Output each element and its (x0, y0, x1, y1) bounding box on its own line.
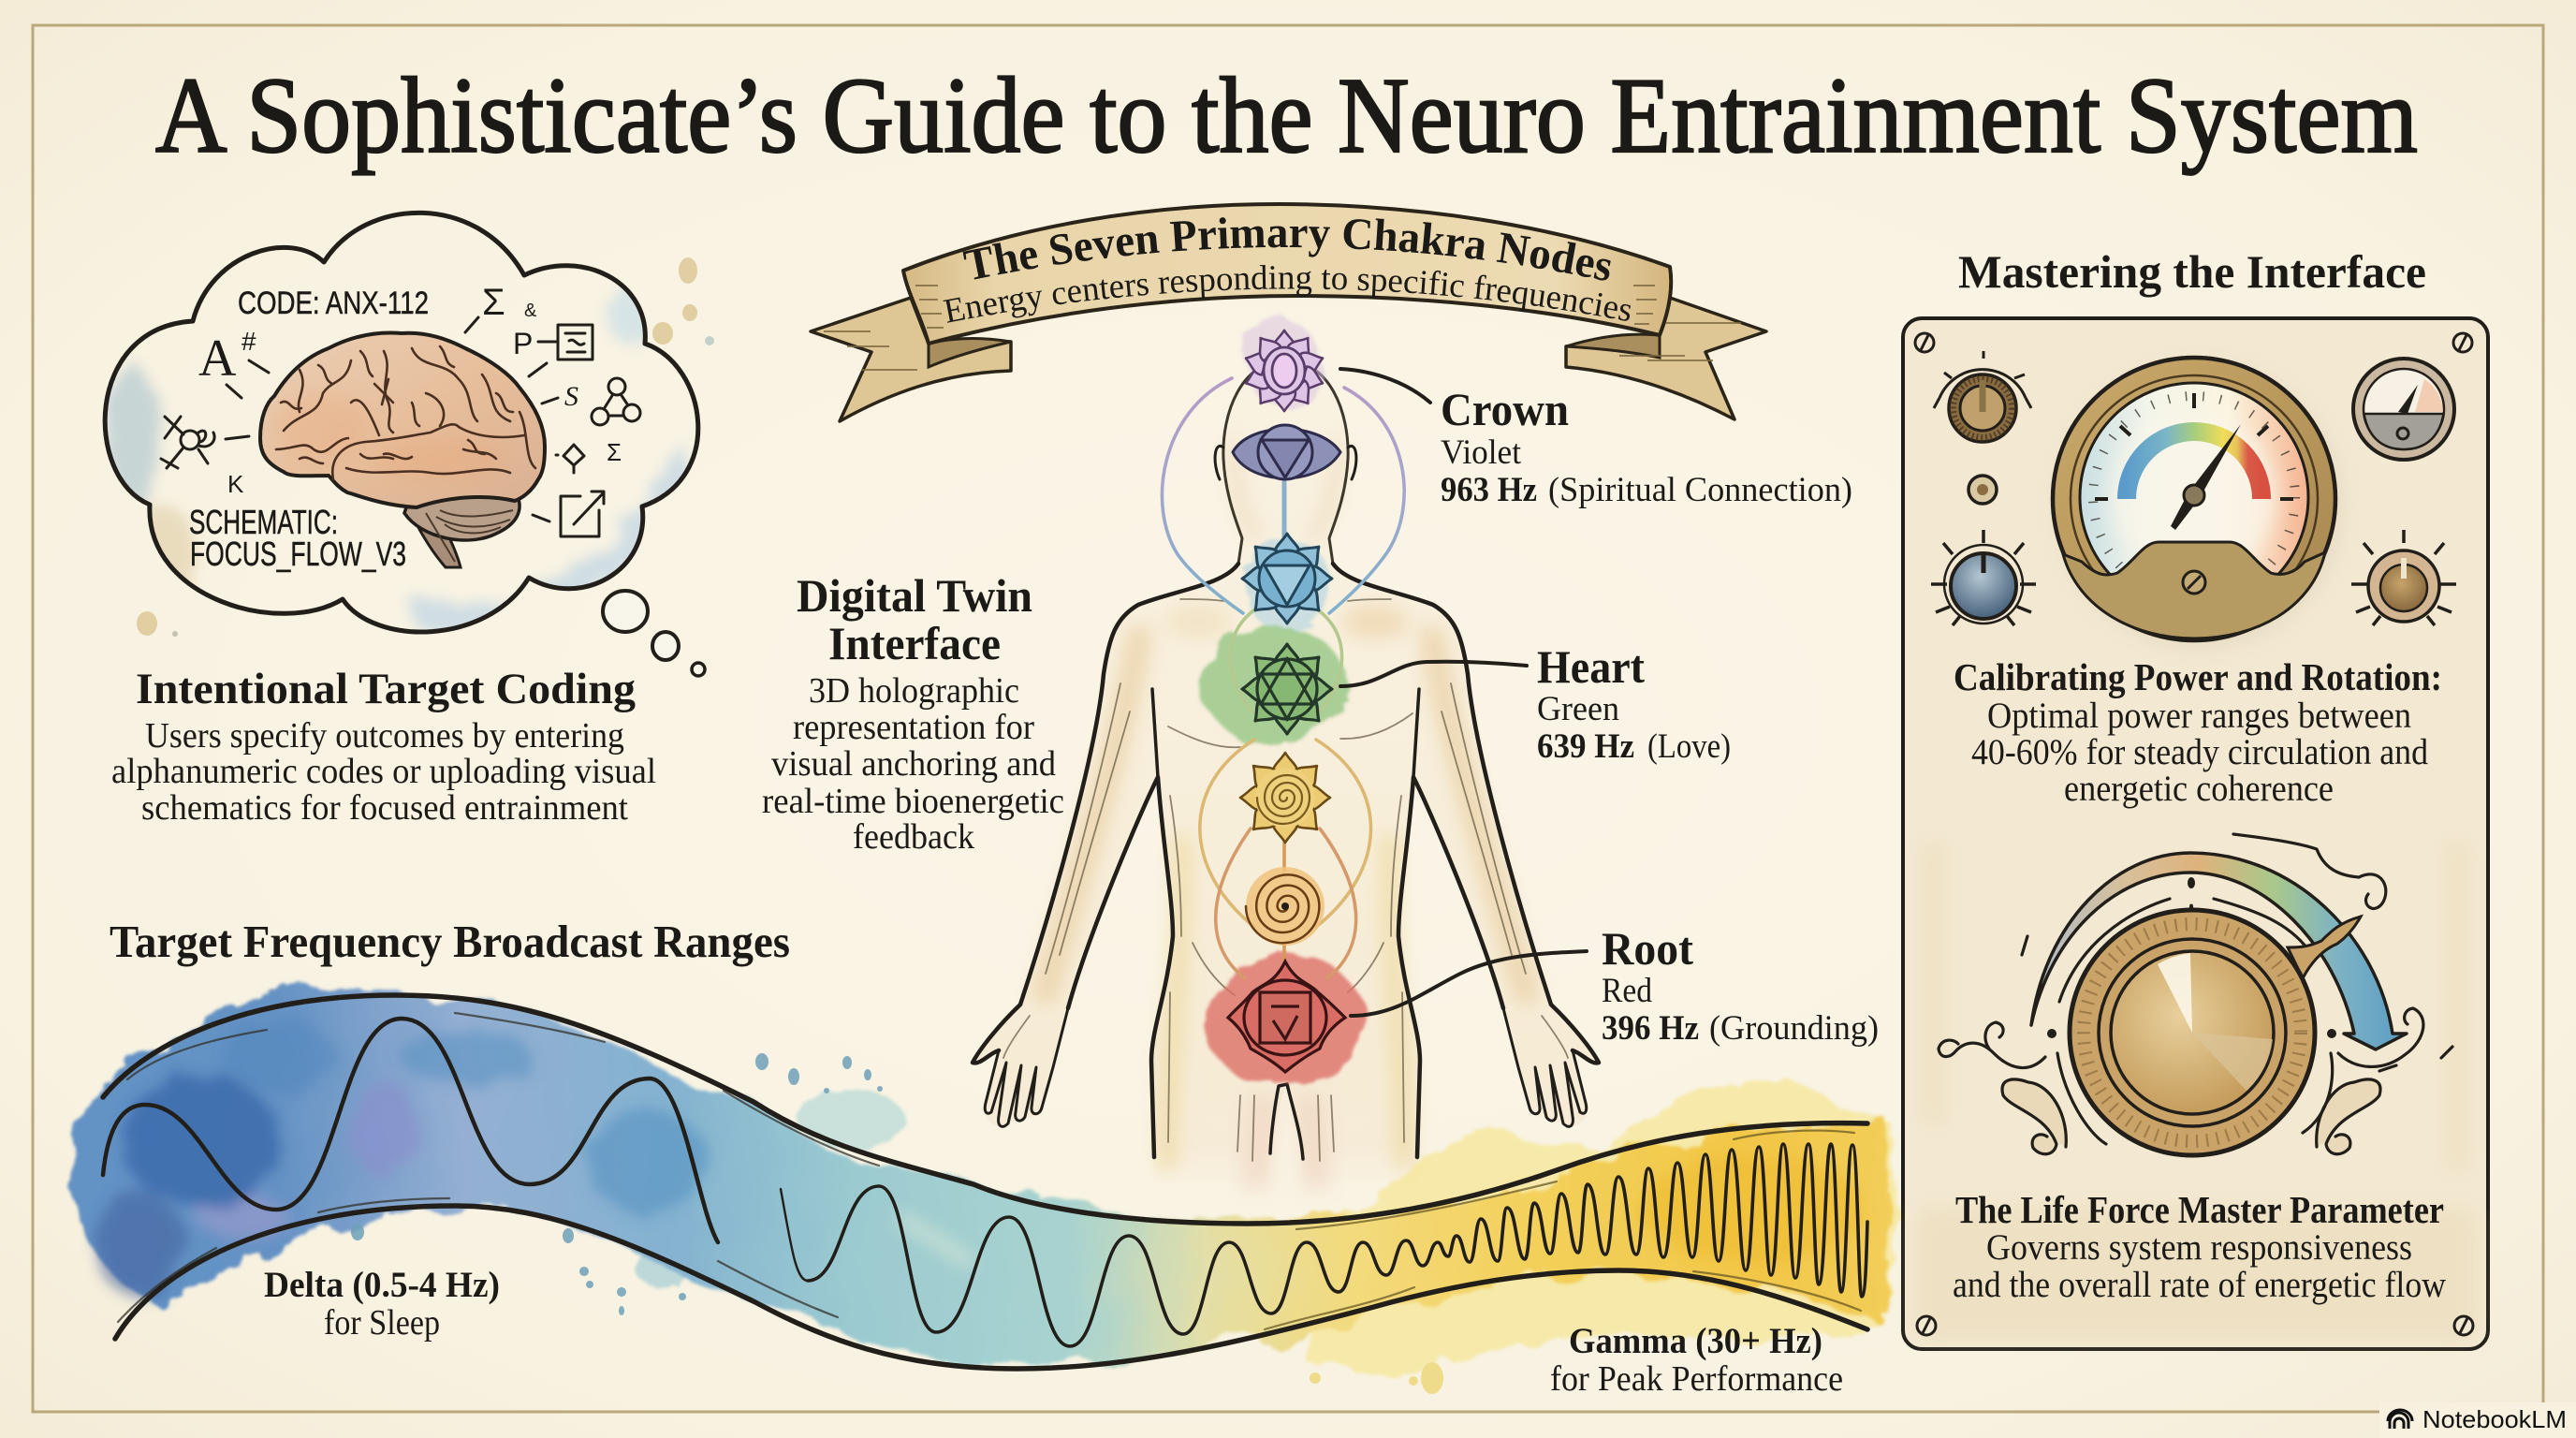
label: delta: for Sleep (324, 1303, 440, 1343)
banner subtitle: Energy centers responding to specific frequencies (944, 265, 1631, 323)
cloud labels and symbols: Σ (607, 438, 622, 466)
control plate (1903, 318, 2488, 1349)
calibration text: 40-60% for steady circulation and (1971, 732, 2428, 772)
icon: solar plexus chakra (1240, 753, 1330, 843)
panel: digital twin interface: real-time bioenergetic (762, 782, 1064, 821)
calibration text (1954, 655, 2442, 809)
label: crown (1441, 383, 1852, 509)
cloud labels and symbols (161, 282, 640, 573)
icon: small gauge (2353, 359, 2454, 460)
icon: life force master knob (1939, 834, 2452, 1155)
label: crown: Violet (1441, 433, 1522, 472)
icon: indicator lamp (1969, 476, 1997, 504)
life force text: The Life Force Master Parameter (1955, 1188, 2444, 1231)
watercolor washes (65, 986, 1902, 1394)
cloud labels and symbols: # (242, 327, 256, 356)
panel: digital twin interface (762, 569, 1064, 857)
banner heading: The Seven Primary Chakra Nodes (962, 217, 1611, 281)
body outline (973, 360, 1599, 1159)
icon: top-left knob (1934, 351, 2031, 442)
power arc (2127, 432, 2261, 499)
panel: digital twin interface: Digital Twin (797, 569, 1032, 622)
label: root: Red (1602, 972, 1652, 1010)
description: schematics for focused entrainment (141, 788, 628, 828)
panel: seven chakra nodes banner (809, 202, 1768, 423)
panel: frequency broadcast ranges (65, 916, 1902, 1399)
ink splatters (137, 257, 714, 637)
panel: digital twin interface: 3D holographic (809, 671, 1019, 711)
cloud labels and symbols: CODE: ANX-112 (238, 286, 429, 321)
panel: digital twin interface: visual anchoring and (771, 744, 1056, 784)
label: crown: (Spiritual Connection) (1548, 471, 1852, 509)
icon: brain (260, 333, 545, 567)
thought bubbles (603, 591, 705, 676)
banner arc guides (968, 247, 1605, 281)
icon: main power gauge (2053, 358, 2342, 648)
label: heart: Green (1537, 690, 1619, 728)
body fill (973, 360, 1599, 1189)
label: delta: Delta (0.5-4 Hz) (264, 1265, 500, 1305)
label: heart (1537, 640, 1731, 766)
label: delta (264, 1265, 500, 1343)
label: heart: Heart (1537, 640, 1645, 693)
ribbon folds (929, 338, 1011, 367)
heading: Intentional Target Coding (136, 665, 637, 713)
knob pointers (2168, 904, 2215, 942)
cloud labels and symbols: P (513, 327, 533, 360)
panel: digital twin interface: feedback (853, 817, 974, 857)
cloud labels and symbols: Σ (482, 282, 505, 323)
icon: heart chakra (1242, 644, 1332, 734)
heading: Mastering the Interface (1958, 245, 2426, 298)
calibration text: Calibrating Power and Rotation: (1954, 655, 2442, 698)
heading: Target Frequency Broadcast Ranges (110, 916, 790, 967)
cloud labels and symbols: A (198, 330, 237, 388)
label: root (1602, 922, 1879, 1048)
icon: blue knob (1931, 530, 2036, 625)
icon: bronze knob (2351, 530, 2456, 625)
knob body (2070, 910, 2315, 1155)
label: gamma: Gamma (30+ Hz) (1569, 1321, 1822, 1361)
icon: crown chakra (1242, 330, 1326, 411)
anatomical shading lines (1003, 599, 1568, 1161)
cloud labels and symbols: K (227, 470, 244, 498)
right ribbon tail (1566, 298, 1766, 419)
icon: root chakra (1228, 961, 1345, 1072)
thin parallel channel lines (118, 1013, 1861, 1329)
label: root: 396 Hz (1602, 1009, 1699, 1048)
life force text: Governs system responsiveness (1986, 1227, 2412, 1268)
cloud labels and symbols: SCHEMATIC: (189, 503, 338, 541)
ribbon body (903, 204, 1671, 344)
life force text (1953, 1188, 2446, 1305)
icon: sacral chakra (1246, 867, 1325, 946)
sweep arrow (2031, 853, 2407, 1049)
label: gamma: for Peak Performance (1550, 1359, 1843, 1399)
leader lines (1340, 369, 1587, 1016)
watercolor washes inside cloud (107, 284, 693, 632)
lower brass plate (2063, 542, 2325, 638)
description: Users specify outcomes by entering (145, 716, 624, 756)
gauge needle (2171, 424, 2241, 530)
title: A Sophisticate’s Guide to the Neuro Entrainment System (155, 56, 2418, 175)
thought cloud outline (105, 213, 698, 632)
colour wash: chakra glows (1202, 322, 1365, 1086)
watermark: NotebookLM: NotebookLM (2422, 1405, 2567, 1433)
life force text: and the overall rate of energetic flow (1953, 1265, 2446, 1305)
label: gamma (1550, 1321, 1843, 1399)
brainwave signal (103, 1019, 1867, 1346)
icon: throat chakra (1242, 534, 1332, 624)
energy channels (1162, 378, 1404, 978)
flourishes (2002, 1079, 2380, 1154)
panel: intentional target coding (105, 213, 714, 828)
label: heart: 639 Hz (1537, 727, 1634, 766)
calibration text: Optimal power ranges between (1987, 696, 2411, 736)
label: root: Root (1602, 922, 1693, 975)
watermark: NotebookLM (2379, 1402, 2576, 1438)
panel: human figure with chakras (973, 322, 1879, 1189)
label: root: (Grounding) (1709, 1009, 1879, 1048)
panel: digital twin interface: Interface (828, 617, 1001, 669)
panel: mastering the interface (1903, 245, 2488, 1349)
label: crown: Crown (1441, 383, 1569, 435)
description (111, 716, 656, 828)
left ribbon tail (811, 298, 1011, 421)
cloud labels and symbols: FOCUS_FLOW_V3 (190, 535, 406, 573)
wave channel edges (103, 995, 1867, 1369)
label: crown: 963 Hz (1441, 471, 1537, 509)
label: heart: (Love) (1647, 727, 1731, 766)
icon: third eye chakra (1233, 425, 1340, 479)
calibration text: energetic coherence (2064, 769, 2334, 809)
panel: digital twin interface: representation for (793, 708, 1034, 747)
cloud labels and symbols: S (564, 381, 578, 412)
description: alphanumeric codes or uploading visual (111, 752, 656, 791)
cloud labels and symbols: & (524, 301, 537, 321)
